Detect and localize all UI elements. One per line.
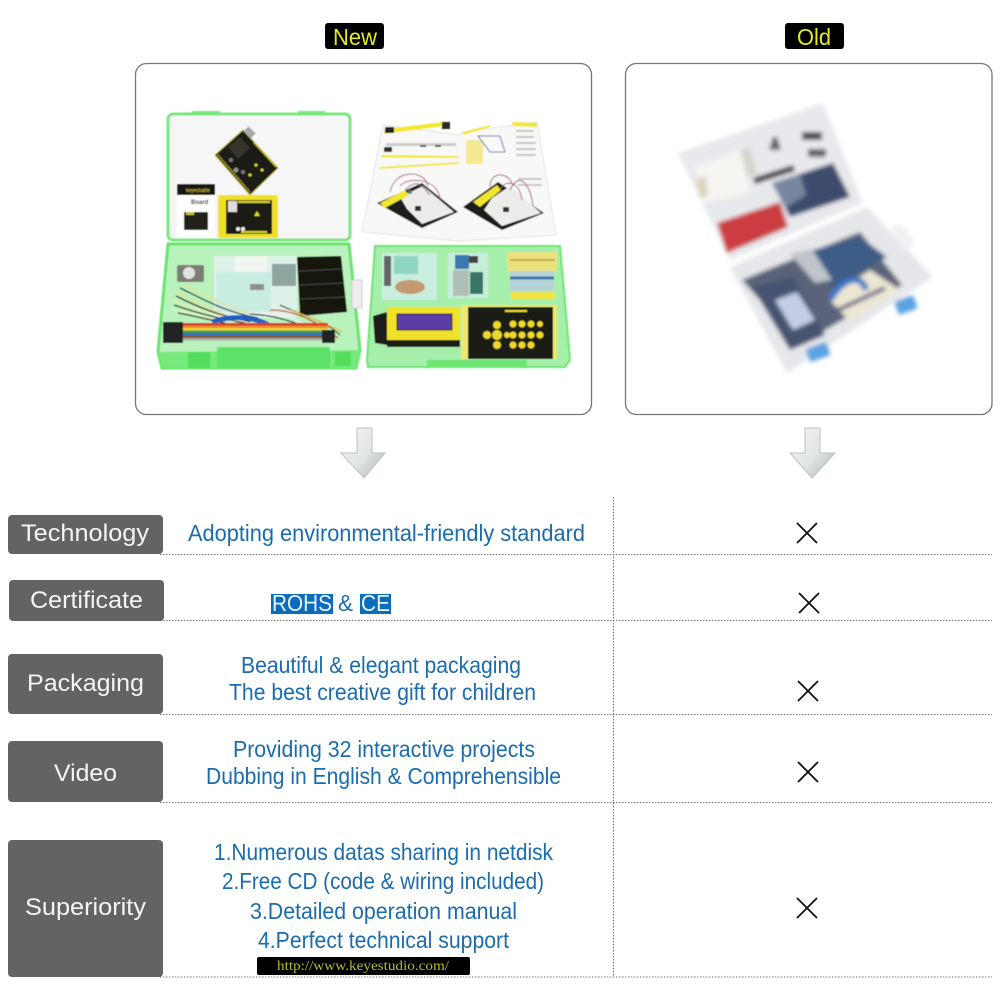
tag: New: New bbox=[333, 24, 377, 50]
row: Superiority: 1.Numerous datas sharing in netdisk bbox=[214, 839, 553, 865]
arrow: new column bbox=[341, 428, 385, 478]
row: Packaging: The best creative gift for children bbox=[229, 679, 536, 705]
bags of parts bbox=[214, 256, 297, 318]
row: Video: Dubbing in English & Comprehensible bbox=[206, 763, 561, 789]
arrow: old column bbox=[790, 428, 835, 478]
row: Superiority: 3.Detailed operation manual bbox=[250, 898, 517, 924]
website link bar bbox=[257, 957, 470, 975]
row: Superiority: 4.Perfect technical support bbox=[258, 927, 509, 953]
manual card bbox=[177, 184, 215, 238]
panel: old kit photo bbox=[626, 64, 992, 414]
row: Superiority: 2.Free CD (code & wiring included) bbox=[222, 868, 544, 894]
resistors bbox=[507, 252, 557, 299]
manual card: keyestudio bbox=[186, 188, 210, 194]
panel: new kit photo bbox=[136, 64, 592, 414]
row: Technology: Adopting environmental-friendly standard bbox=[188, 520, 585, 546]
row: Packaging bbox=[8, 652, 536, 714]
row: Technology bbox=[8, 515, 585, 554]
key card bbox=[461, 305, 557, 359]
sensor bag bbox=[382, 253, 437, 300]
row: Technology: Technology bbox=[21, 520, 150, 547]
main board bbox=[215, 126, 278, 195]
cross: Technology bbox=[797, 523, 817, 543]
open case lid bbox=[168, 111, 350, 240]
ribbon cable bbox=[163, 322, 335, 343]
cross: Certificate bbox=[799, 593, 819, 613]
row: Certificate bbox=[9, 580, 391, 621]
row: Superiority: Superiority bbox=[25, 894, 147, 921]
keypad bag bbox=[448, 253, 488, 298]
case front and handle bbox=[158, 347, 360, 368]
row: Certificate: ROHS bbox=[272, 590, 332, 616]
open case bottom with parts bbox=[158, 244, 362, 368]
cross: Packaging bbox=[798, 681, 818, 701]
jumper wires bbox=[172, 285, 342, 340]
row: Video: Providing 32 interactive projects bbox=[233, 736, 535, 762]
cross: Superiority bbox=[797, 898, 817, 918]
parts tray bbox=[367, 246, 570, 368]
coin battery module bbox=[177, 265, 204, 282]
book diagram left bbox=[377, 174, 458, 228]
row: Packaging: Packaging bbox=[27, 670, 144, 697]
tag: Old bbox=[785, 23, 844, 50]
instruction book bbox=[362, 122, 556, 241]
book diagram right bbox=[463, 175, 544, 230]
cross: Video bbox=[798, 762, 818, 782]
tag: Old: Old bbox=[797, 24, 831, 50]
row: Packaging: Beautiful & elegant packaging bbox=[241, 652, 521, 678]
row: Certificate: CE bbox=[361, 590, 390, 616]
boxed board bbox=[218, 195, 278, 238]
row: Certificate: & bbox=[338, 590, 353, 616]
LCD module bbox=[373, 307, 460, 347]
old case bottom bbox=[730, 207, 933, 373]
manual card: Board bbox=[191, 200, 209, 206]
row: Certificate: Certificate bbox=[30, 587, 143, 614]
row: Video: Video bbox=[54, 760, 117, 787]
website link bar: http://www.keyestudio.com/ bbox=[277, 959, 449, 974]
battery holders bbox=[297, 256, 347, 316]
row: Superiority bbox=[8, 839, 553, 977]
row: Video bbox=[8, 736, 561, 802]
old case lid bbox=[678, 103, 863, 260]
